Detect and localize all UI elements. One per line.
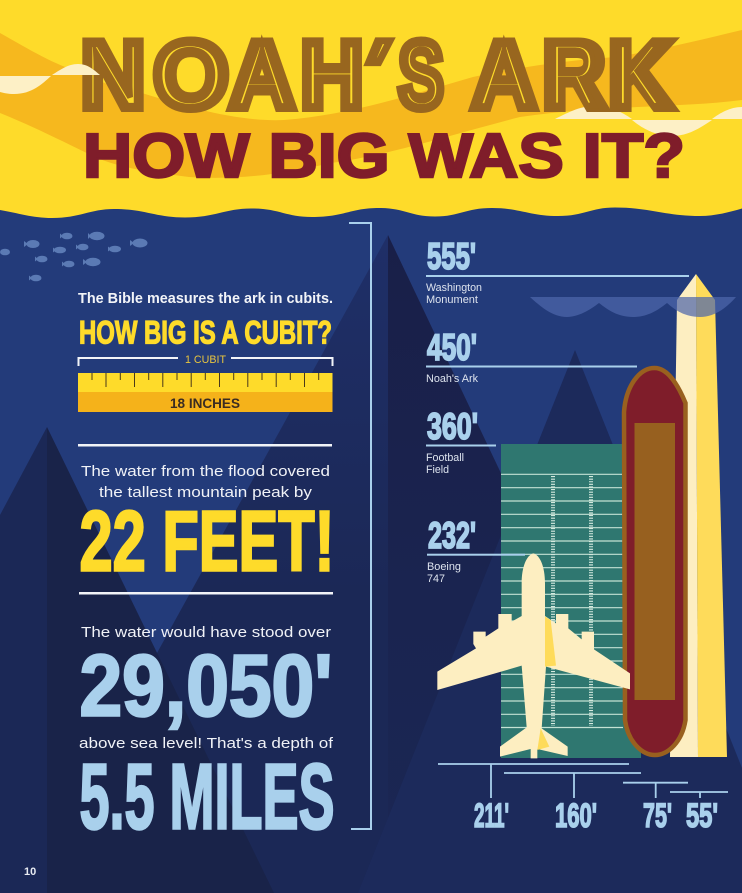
ruler label: 18 INCHES	[170, 395, 240, 411]
cream cloud left upper, over the title	[52, 64, 100, 75]
measure: Washington Monument 555	[426, 236, 689, 306]
measure: Football Field 360	[426, 406, 496, 476]
title: Noah's Ark: H	[302, 26, 362, 126]
cubit span bracket	[78, 358, 332, 366]
mountains	[0, 235, 742, 893]
measure: Noah's Ark 450	[426, 327, 637, 385]
measure: Football Field 360: Field	[426, 464, 449, 476]
title: Noah's Ark	[81, 22, 672, 128]
text: water covered peak: the tallest mountain peak by	[99, 484, 313, 501]
measurement bracket	[349, 223, 371, 829]
school of fish	[0, 232, 148, 281]
Noah's Ark top view	[624, 368, 686, 755]
title: Noah's Ark: H	[301, 23, 363, 128]
measure: Boeing 747 232: 747	[427, 573, 445, 585]
darker yellow sky swoosh	[0, 30, 742, 178]
text: above sea level: above sea level! That's a depth of	[79, 735, 334, 752]
text: water covered peak: The water from the flood covered	[81, 463, 330, 480]
measure: Washington Monument 555: 555'	[427, 236, 476, 277]
ark deck	[634, 423, 675, 700]
title: Noah's Ark: S	[398, 23, 444, 128]
title: Noah's Ark: '	[343, 27, 399, 110]
cubit section	[78, 291, 333, 412]
mountain: center left face	[0, 235, 388, 893]
intro text: The Bible measures the ark in cubits.	[78, 291, 333, 307]
title: Noah's Ark: '	[338, 22, 402, 123]
football field	[501, 444, 641, 758]
mountain: small rear peak	[358, 350, 742, 893]
mountain: left, right face	[47, 427, 274, 893]
measure: Noah's Ark 450: Noah's Ark	[426, 373, 478, 385]
cloud over monument	[530, 297, 736, 317]
mountain: left, left face	[0, 427, 47, 893]
width labels	[474, 797, 718, 835]
measure: Washington Monument 555: Monument	[426, 294, 478, 306]
big number: 22 feet: 22 FEET!	[80, 494, 334, 590]
title: How big was it?: HOW BIG WAS IT?	[83, 122, 685, 191]
title: Noah's Ark: A	[236, 24, 288, 125]
title: Noah's Ark: S	[402, 25, 441, 126]
measure: Boeing 747 232	[427, 515, 525, 585]
page number: 10	[24, 866, 36, 878]
cubit label: 1 CUBIT	[185, 354, 226, 366]
divider	[79, 592, 333, 594]
ruler	[78, 373, 332, 412]
title: Noah's Ark: A	[230, 23, 294, 128]
title: Noah's Ark: O	[155, 26, 225, 126]
title: Noah's Ark: O	[154, 23, 228, 128]
sea background with wavy top	[0, 208, 742, 893]
width labels: 211'	[474, 797, 509, 835]
heading: how big is a cubit: HOW BIG IS A CUBIT?	[79, 313, 332, 350]
big number: 29,050 feet: 29,050'	[80, 638, 332, 734]
width labels: 75'	[643, 797, 672, 835]
title: Noah's Ark: R	[543, 23, 605, 128]
mountain: center right face	[388, 235, 700, 893]
divider	[78, 444, 332, 446]
measure: Boeing 747 232: 232'	[428, 515, 476, 556]
width measure lines	[438, 764, 728, 798]
big number: 5.5 miles: 5.5 MILES	[80, 744, 334, 848]
yellow sky background	[0, 0, 742, 240]
measure: Boeing 747 232: Boeing	[427, 561, 461, 573]
measure: Football Field 360: Football	[426, 452, 464, 464]
Washington Monument	[670, 274, 727, 757]
title: Noah's Ark: N	[81, 23, 145, 128]
cream cloud right	[555, 106, 742, 136]
measure: Football Field 360: 360'	[427, 406, 478, 447]
title: Noah's Ark: K	[608, 23, 672, 128]
width labels: 160'	[555, 797, 597, 835]
text: water covered peak	[81, 463, 330, 501]
title: Noah's Ark: A	[472, 23, 536, 128]
cream cloud left lower	[0, 76, 51, 94]
width labels: 55'	[686, 797, 718, 835]
title: Noah's Ark: R	[548, 25, 598, 125]
measure: Washington Monument 555: Washington	[426, 282, 482, 294]
title: Noah's Ark: A	[478, 24, 530, 125]
title: Noah's Ark: K	[613, 26, 663, 126]
text: water stood over: The water would have stood over	[81, 624, 331, 641]
measure: Noah's Ark 450: 450'	[427, 327, 477, 368]
Boeing 747 plane	[437, 553, 630, 758]
title: Noah's Ark: N	[82, 25, 144, 126]
